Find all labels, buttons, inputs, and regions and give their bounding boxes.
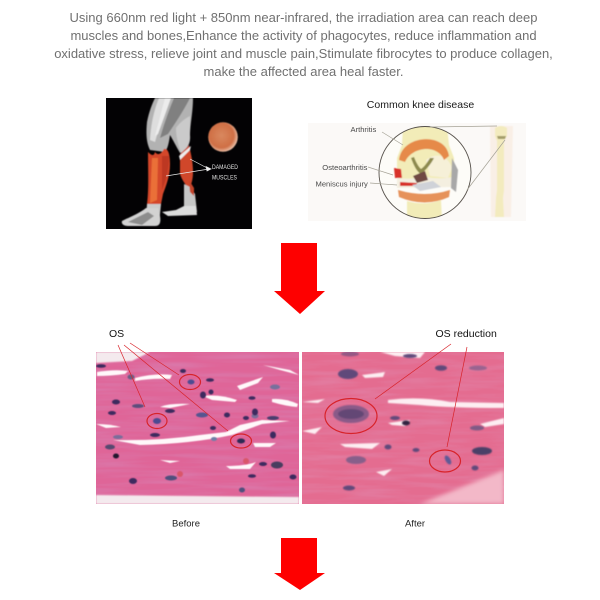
nuclei [333, 352, 492, 490]
intro text block: make the affected area heal faster. [204, 64, 403, 79]
muscle label: MUSCLES [212, 174, 237, 182]
label: OS: OS [109, 328, 124, 340]
knee labels: Arthritis [350, 125, 376, 134]
white gaps [302, 352, 504, 476]
muscle label: DAMAGED [212, 164, 238, 171]
panel: damaged muscles photo [106, 98, 252, 229]
magnifier circle [379, 126, 471, 218]
caption: after: After [405, 518, 425, 530]
callouts: after leader lines and circles [325, 344, 467, 472]
panel: after histology image [302, 352, 504, 504]
arrow: down 1 [274, 243, 325, 314]
magnifier background [379, 126, 471, 218]
intro text block: oxidative stress, relieve joint and muscle pain,Stimulate fibrocytes to produce collagen, [54, 46, 553, 61]
tissue fibre texture [302, 352, 504, 504]
panel: knee diagram [316, 125, 514, 219]
tissue fibre texture [96, 352, 299, 504]
panel: before histology image [96, 352, 299, 504]
arrow: down 2 [274, 538, 325, 590]
callouts: before leader lines and circles [118, 343, 252, 448]
white gaps [96, 365, 299, 469]
caption: before: Before [172, 518, 200, 530]
pale lower right area [420, 470, 504, 504]
label: OS reduction: OS reduction [436, 328, 497, 340]
intro text block [54, 10, 553, 79]
knee labels [316, 125, 376, 188]
intro text block: Using 660nm red light + 850nm near-infrared, the irradiation area can reach deep [70, 10, 537, 25]
heading: common knee disease: Common knee disease [367, 99, 474, 111]
red blood cells [177, 458, 249, 477]
icon: damaged muscle cell [208, 122, 238, 152]
nuclei [96, 364, 296, 492]
illustration: legs with damaged muscles [122, 98, 197, 226]
arrows to damaged muscles [166, 159, 211, 176]
intro text block: muscles and bones,Enhance the activity of phagocytes, reduce inflammation and [70, 28, 537, 43]
magnifier leader lines [368, 126, 505, 190]
knee labels: Meniscus injury [316, 180, 368, 188]
knee labels: Osteoarthritis [322, 163, 368, 172]
illustration: magnified knee [394, 126, 458, 220]
illustration: leg bones [490, 126, 513, 217]
muscle label [212, 164, 238, 180]
corner whites [96, 352, 299, 504]
